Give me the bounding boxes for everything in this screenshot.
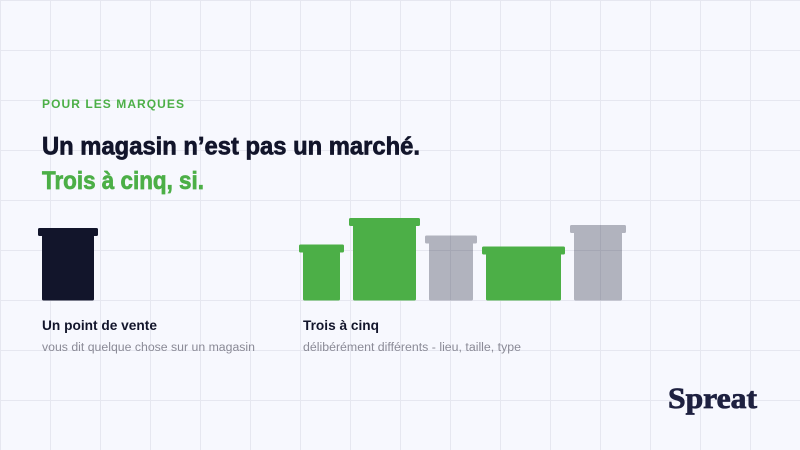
eyebrow: POUR LES MARQUES	[42, 97, 184, 111]
logo: Spreat: Spreat	[668, 382, 757, 415]
label: one store: Un point de vente	[42, 318, 157, 333]
icon: single store	[38, 228, 98, 300]
store 2 green	[349, 218, 420, 300]
description: three to five: délibérément différents - lieu, taille, type	[303, 342, 521, 354]
store group: three to five	[299, 218, 626, 300]
subtitle: Trois à cinq, si.	[42, 167, 204, 195]
store 5 grey	[570, 225, 626, 300]
title: Un magasin n’est pas un marché.	[42, 132, 420, 160]
description: one store: vous dit quelque chose sur un magasin	[42, 342, 255, 354]
label: three to five: Trois à cinq	[303, 318, 379, 333]
store 1 green	[299, 244, 344, 300]
store 4 green	[482, 246, 565, 300]
store 3 grey	[425, 236, 477, 300]
